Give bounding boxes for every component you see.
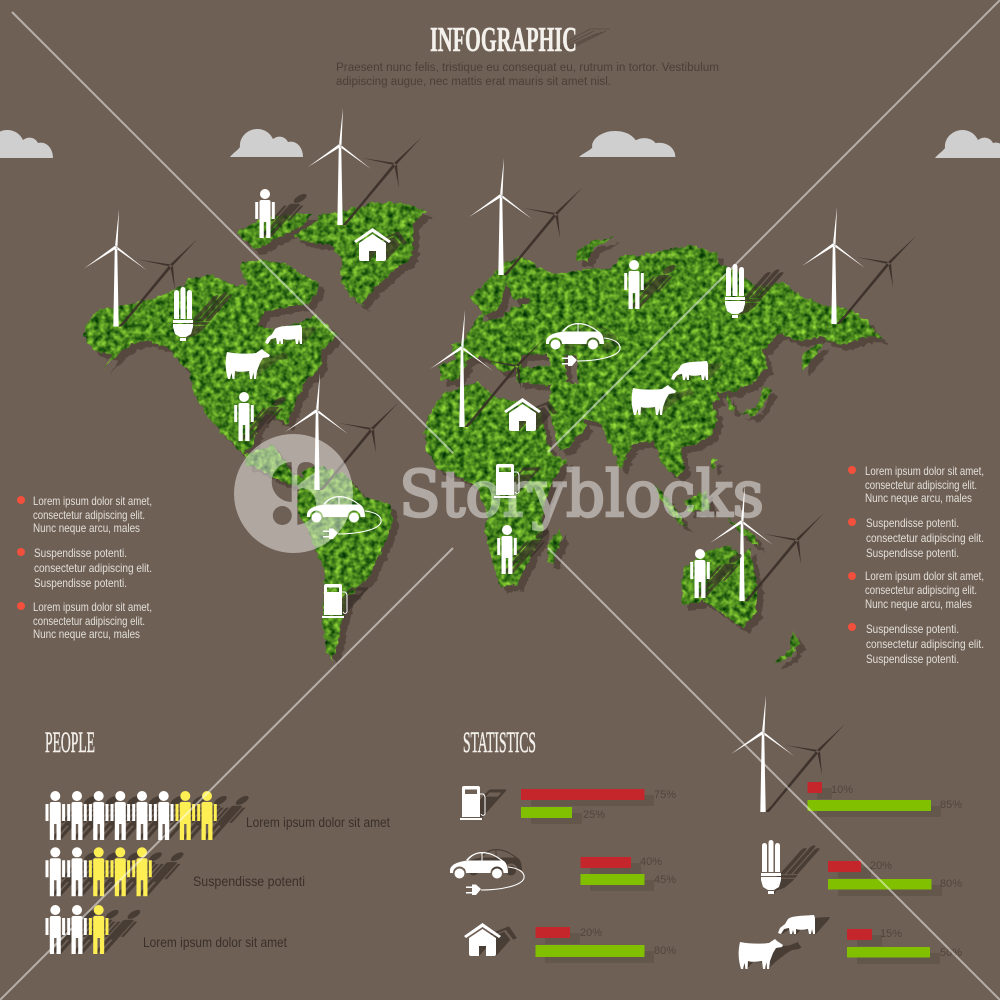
title: INFOGRAPHIC — [430, 20, 577, 59]
left bullet list: Lorem ipsum dolor sit amet, — [33, 494, 152, 508]
left bullet list: Nunc neque arcu, males — [33, 627, 140, 641]
left bullet list: consectetur adipiscing elit. — [34, 561, 152, 575]
landmass: new zealand — [773, 630, 800, 664]
landmass: sumatra — [655, 485, 687, 526]
text: STATISTICS — [463, 726, 536, 759]
landmass: south america — [298, 465, 393, 660]
right bullet list: Suspendisse potenti. — [866, 546, 959, 560]
clouds — [0, 129, 1000, 158]
map icons: houses — [354, 228, 567, 431]
map icon: fuel pump, africa — [494, 464, 543, 498]
right bullet list: Suspendisse potenti. — [866, 652, 959, 666]
watermark: logo — [234, 434, 353, 553]
landmass: north america — [83, 260, 337, 455]
landmass: central america — [243, 445, 307, 488]
stats row: wind turbine: 10% — [831, 784, 853, 796]
stats row: cows — [738, 915, 962, 969]
map icon: electric car, eurasia — [546, 323, 620, 366]
right bullet list: Suspendisse potenti. — [866, 516, 959, 530]
landmass: australia — [682, 546, 757, 628]
landmass: madagascar — [547, 528, 562, 562]
landmass: korea — [727, 393, 735, 410]
right bullet list: Suspendisse potenti. — [866, 622, 959, 636]
stats row: fuel pump: 75% — [654, 789, 676, 801]
text: PEOPLE — [45, 726, 95, 759]
landmass: greenland west — [237, 213, 313, 249]
stats row: fuel pump: 25% — [583, 809, 605, 821]
left bullet list — [17, 494, 152, 641]
people chart: row 3: Lorem ipsum dolor sit amet — [143, 934, 287, 950]
stats row: electric car — [450, 849, 676, 895]
landmass: novaya zemlya — [577, 237, 615, 262]
landmass: philippines — [710, 459, 717, 469]
watermark: wordmark: Storyblocks — [399, 458, 764, 532]
right bullet list: Nunc neque arcu, males — [865, 597, 972, 611]
landmass: sakhalin — [802, 342, 823, 372]
left bullet list: Suspendisse potenti. — [34, 576, 127, 590]
left bullet list: Lorem ipsum dolor sit amet, — [33, 600, 152, 614]
people chart: row 1 — [46, 791, 390, 840]
right bullet list: Nunc neque arcu, males — [865, 491, 972, 505]
people chart: row 2 — [46, 847, 305, 896]
stats row: electric car: 40% — [640, 856, 662, 868]
map icons: people — [234, 189, 749, 598]
world map — [83, 202, 882, 664]
stats row: house: 80% — [654, 945, 676, 957]
landmass: africa — [425, 382, 567, 587]
stats row: light bulb — [761, 840, 962, 896]
left bullet list: consectetur adipiscing elit. — [33, 508, 145, 522]
landmass: eurasia — [440, 245, 882, 477]
left bullet list: Nunc neque arcu, males — [33, 521, 140, 535]
stats row: wind turbine — [731, 695, 962, 817]
map icon: fuel pump, south america — [322, 584, 371, 618]
landmass: greenland — [293, 202, 427, 305]
people chart: row 2: Suspendisse potenti — [193, 873, 305, 889]
right bullet list — [848, 464, 984, 666]
map icon: electric car, south america — [307, 496, 381, 539]
map icons: wind turbines — [84, 108, 916, 601]
people chart: row 1: Lorem ipsum dolor sit amet — [246, 814, 390, 830]
stats row: electric car: 45% — [654, 874, 676, 886]
stats row: cows: 50% — [940, 947, 962, 959]
people chart: row 3 — [46, 905, 287, 954]
stats row: house — [464, 923, 676, 963]
stats row: fuel pump — [460, 786, 676, 824]
left bullet list: consectetur adipiscing elit. — [33, 614, 145, 628]
intro text — [336, 62, 719, 88]
map icons: light bulbs — [173, 264, 788, 341]
stats row: wind turbine: 85% — [940, 799, 962, 811]
map icons: cows — [225, 325, 724, 415]
left bullet list: Suspendisse potenti. — [34, 546, 127, 560]
stats row: cows: 15% — [880, 928, 902, 940]
stats row: light bulb: 20% — [870, 860, 892, 872]
landmass: borneo — [683, 491, 710, 512]
stats row: house: 20% — [580, 927, 602, 939]
intro text: adipiscing augue, nec mattis erat mauris sit amet nisl. — [336, 76, 611, 88]
intro text: Praesent nunc felis, tristique eu consequat eu, rutrum in tortor. Vestibulum — [336, 62, 719, 74]
landmass: new guinea — [727, 517, 760, 548]
stats row: light bulb: 80% — [940, 878, 962, 890]
landmass: japan — [740, 387, 772, 417]
